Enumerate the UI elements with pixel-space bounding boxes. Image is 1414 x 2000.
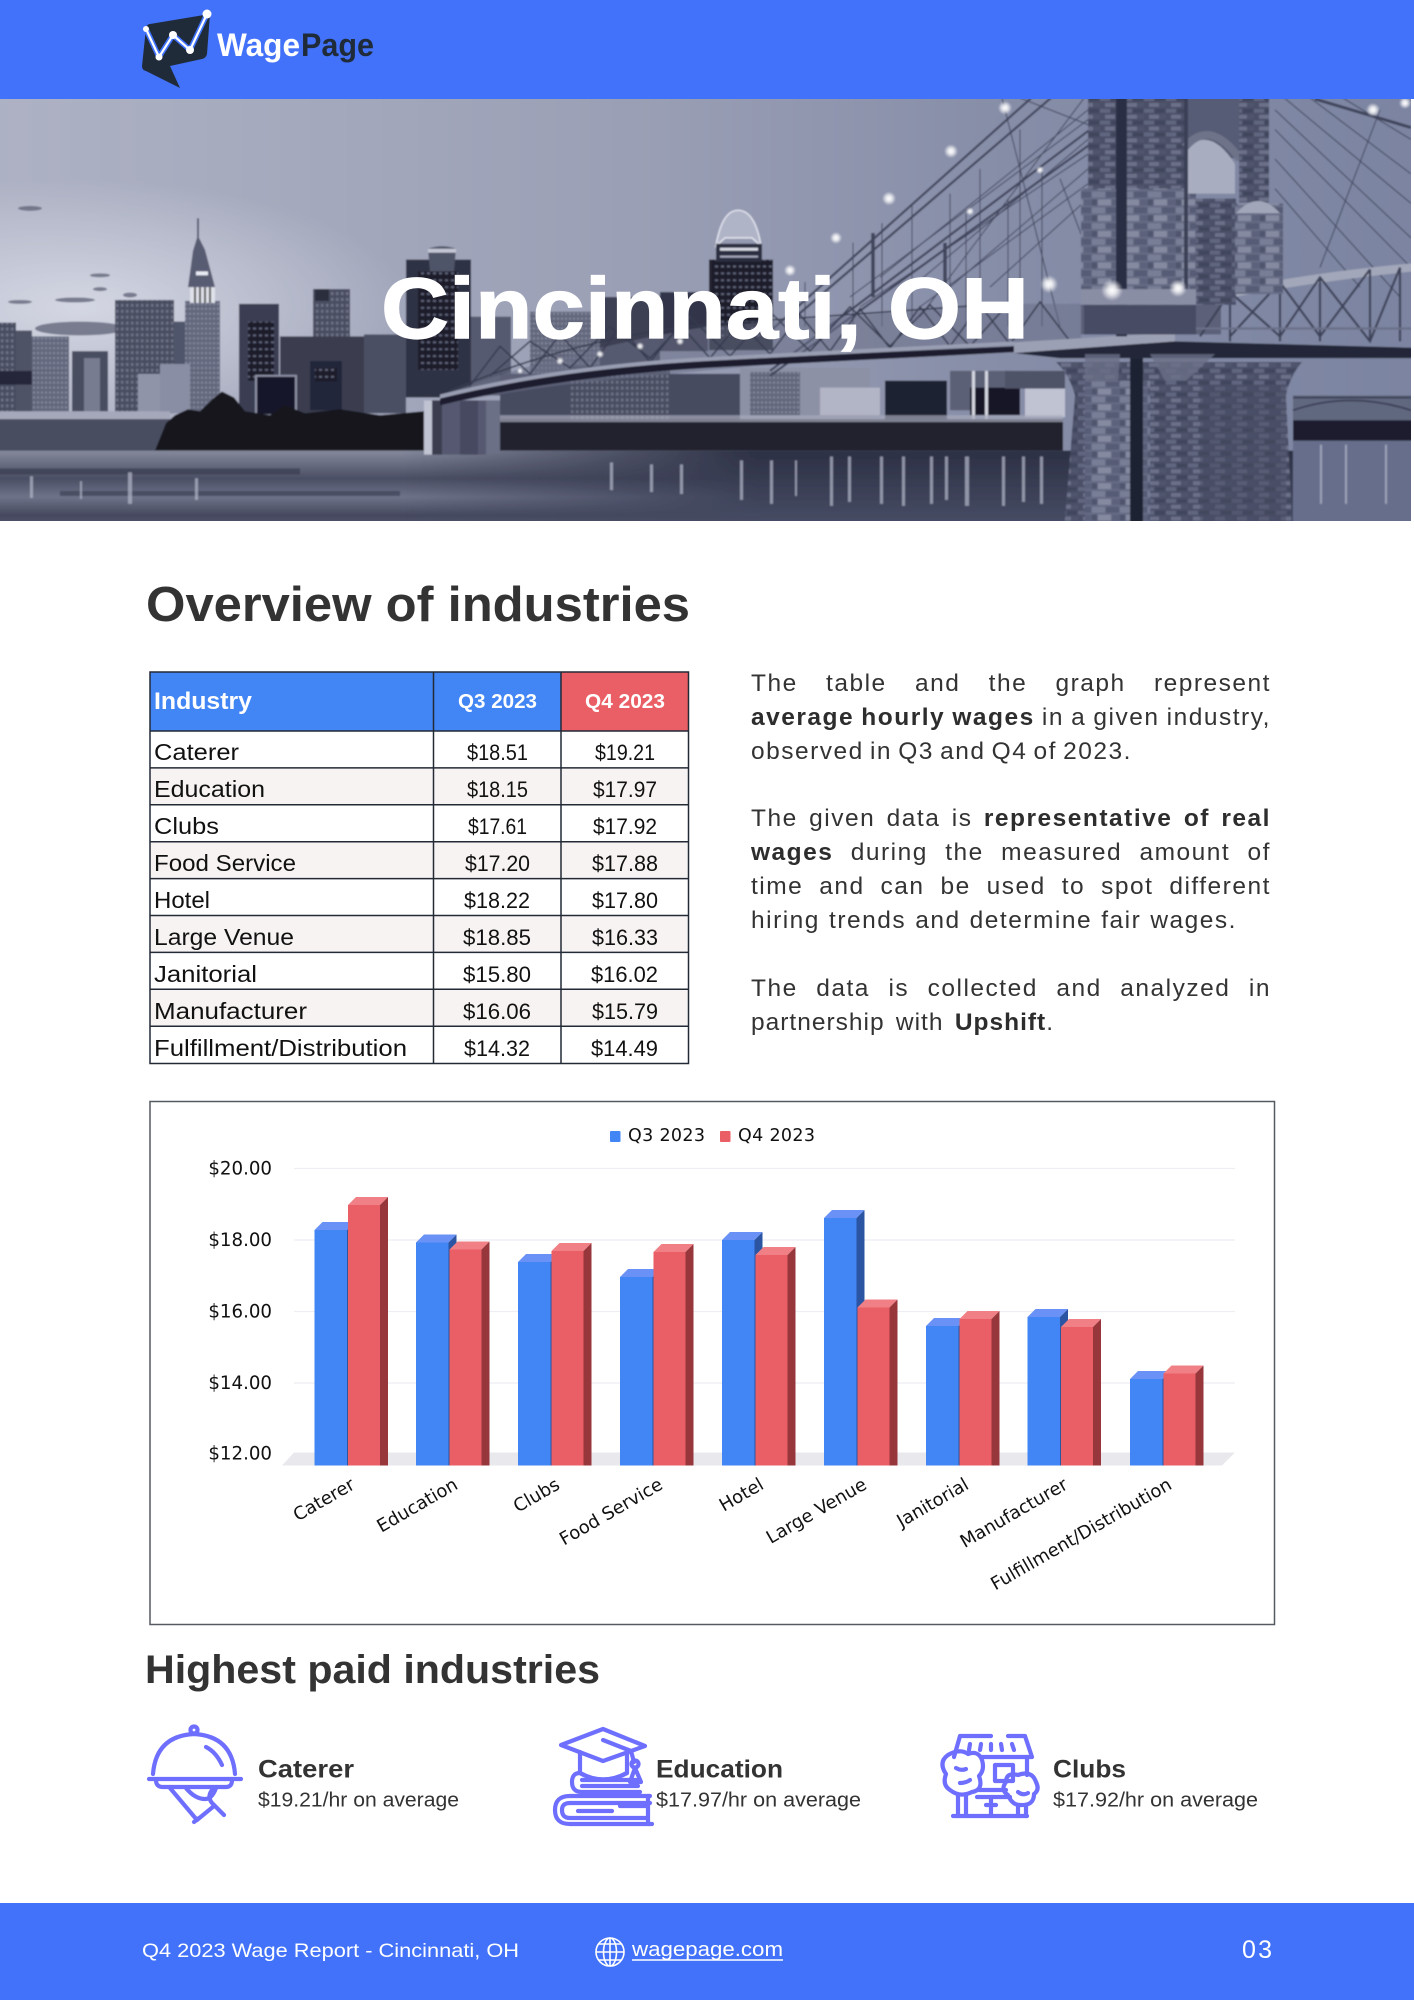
x axis labels: Janitorial bbox=[892, 1474, 972, 1532]
gridlines bbox=[294, 1168, 1235, 1383]
text block: table and graph description: given bbox=[1093, 704, 1160, 731]
text block: table and graph description: of bbox=[1034, 738, 1057, 765]
text block: table and graph description: hiring bbox=[751, 907, 820, 934]
text block: table and graph description: can bbox=[881, 873, 925, 900]
heading: overview of industries: Overview of industries bbox=[146, 578, 690, 632]
item: Caterer: Caterer bbox=[258, 1756, 354, 1784]
text block: table and graph description: measured bbox=[1001, 839, 1122, 866]
text block: table and graph description: trends bbox=[829, 907, 906, 934]
text block: table and graph description: wages bbox=[751, 839, 833, 866]
x axis labels bbox=[290, 1474, 1176, 1595]
wage table: $17.97 bbox=[593, 777, 657, 802]
wage table: $17.88 bbox=[592, 851, 658, 876]
text block: table and graph description: Q4 bbox=[992, 738, 1027, 765]
wage table: Hotel bbox=[154, 887, 210, 913]
y axis labels: $14.00 bbox=[208, 1373, 272, 1394]
text block: table and graph description: and bbox=[1056, 975, 1102, 1002]
wage table: $17.61 bbox=[468, 814, 527, 839]
x axis labels: Caterer bbox=[290, 1474, 359, 1526]
text block: table and graph description: in bbox=[1249, 975, 1271, 1002]
text block: table and graph description: the bbox=[989, 670, 1027, 697]
text block: table and graph description: representative bbox=[984, 805, 1172, 832]
x axis labels: Large Venue bbox=[763, 1474, 870, 1548]
x axis labels: Education bbox=[373, 1474, 462, 1537]
footer report title: Q4 2023 Wage Report - Cincinnati, OH bbox=[142, 1940, 519, 1962]
river bbox=[0, 440, 1411, 521]
bridge cables bbox=[770, 90, 1411, 376]
wage table: Large Venue bbox=[154, 924, 294, 950]
text block: table and graph description: is bbox=[952, 805, 972, 832]
item: Clubs: $17.92/hr on average bbox=[1053, 1790, 1258, 1812]
text block: table and graph description: and bbox=[819, 873, 865, 900]
bridge lights bbox=[517, 97, 1411, 374]
wage table: $17.20 bbox=[465, 851, 530, 876]
x axis labels: Clubs bbox=[510, 1474, 564, 1517]
far city below bridge bbox=[500, 366, 1065, 423]
wage table: $18.22 bbox=[464, 888, 530, 913]
text block: table and graph description: and bbox=[915, 907, 961, 934]
chart legend: Q4 2023 bbox=[738, 1126, 815, 1146]
text block: table and graph description: in bbox=[1042, 704, 1064, 731]
item: Education: $17.97/hr on average bbox=[656, 1790, 861, 1812]
text block: table and graph description: data bbox=[816, 975, 870, 1002]
text block: table and graph description: real bbox=[1221, 805, 1271, 832]
bridge truss and deck bbox=[440, 262, 1414, 405]
text block: table and graph description: The bbox=[751, 805, 798, 832]
main bridge tower bbox=[1081, 90, 1283, 336]
chart legend bbox=[610, 1126, 815, 1146]
bar chart panel bbox=[150, 1102, 1274, 1624]
wage table: Manufacturer bbox=[154, 998, 307, 1024]
text block: table and graph description: The bbox=[751, 975, 798, 1002]
header bar bbox=[0, 0, 1414, 99]
wage table: $15.79 bbox=[592, 999, 658, 1024]
chart legend: Q3 2023 bbox=[628, 1126, 705, 1146]
text block: table and graph description: of bbox=[1248, 839, 1271, 866]
wage table: Janitorial bbox=[154, 961, 257, 987]
icon: storefront with trees bbox=[942, 1736, 1038, 1816]
text block: table and graph description: and bbox=[940, 738, 985, 765]
text block: table and graph description: analyzed bbox=[1120, 975, 1230, 1002]
text block: table and graph description: during bbox=[851, 839, 928, 866]
icon: graduation cap on books bbox=[555, 1729, 652, 1824]
text block: table and graph description: determine bbox=[970, 907, 1092, 934]
wage table: Clubs bbox=[154, 813, 219, 839]
text block: table and graph description: collected bbox=[928, 975, 1038, 1002]
footer bar bbox=[0, 1903, 1414, 2000]
chart floor bbox=[282, 1452, 1235, 1466]
y axis labels: $20.00 bbox=[208, 1158, 272, 1180]
x axis labels: Food Service bbox=[556, 1474, 666, 1550]
text block: table and graph description: the bbox=[945, 839, 984, 866]
item: Clubs: Clubs bbox=[1053, 1756, 1126, 1784]
text block: table and graph description: to bbox=[1062, 873, 1085, 900]
text block: table and graph description: different bbox=[1169, 873, 1271, 900]
shoreline and trees bbox=[0, 392, 1414, 451]
text block: table and graph description: The bbox=[751, 670, 798, 697]
text block: table and graph description: in bbox=[870, 738, 892, 765]
wage table bbox=[150, 672, 689, 1064]
text block: table and graph description: wages. bbox=[1150, 907, 1237, 934]
wage table: Industry bbox=[154, 688, 253, 715]
x axis labels: Hotel bbox=[716, 1474, 768, 1516]
footer website link: wagepage.com bbox=[631, 1939, 783, 1961]
heading: highest paid industries: Highest paid industries bbox=[145, 1648, 600, 1692]
text block: table and graph description: average bbox=[751, 704, 854, 731]
bars: Q3 2023 and Q4 2023 bbox=[314, 1197, 1204, 1466]
text block: table and graph description: hourly bbox=[861, 704, 945, 731]
hero photo: Cincinnati skyline and Roebling bridge bbox=[0, 99, 1411, 521]
icon: globe bbox=[596, 1938, 624, 1966]
lower bridge pier bbox=[1056, 353, 1302, 521]
wage table: $16.02 bbox=[591, 962, 658, 987]
x axis labels: Manufacturer bbox=[957, 1474, 1072, 1553]
y axis labels: $12.00 bbox=[208, 1444, 272, 1464]
text block: table and graph description: Upshift. bbox=[955, 1009, 1054, 1036]
item: Caterer: $19.21/hr on average bbox=[258, 1790, 459, 1812]
text block: table and graph description: spot bbox=[1101, 873, 1153, 900]
wage table: $18.15 bbox=[467, 777, 528, 802]
logo: WagePage: Page bbox=[301, 27, 374, 63]
text block: table and graph description: of bbox=[1184, 805, 1210, 832]
item: Caterer bbox=[149, 1726, 459, 1822]
y axis labels bbox=[208, 1158, 272, 1464]
wage table: $14.49 bbox=[591, 1036, 658, 1061]
wage table: $17.80 bbox=[592, 888, 658, 913]
wage table: $16.33 bbox=[592, 925, 658, 950]
wage table: Q4 2023 bbox=[585, 691, 665, 713]
text block: table and graph description: graph bbox=[1056, 670, 1126, 697]
wage table: Q3 2023 bbox=[458, 691, 537, 713]
text block: table and graph description: wages bbox=[952, 704, 1035, 731]
text block: table and graph description: a bbox=[1071, 704, 1086, 731]
text block: table and graph description: time bbox=[751, 873, 803, 900]
y axis labels: $18.00 bbox=[208, 1230, 272, 1251]
text block: table and graph description: industry, bbox=[1167, 704, 1271, 731]
text block: table and graph description: used bbox=[987, 873, 1046, 900]
skyline bbox=[0, 210, 773, 421]
text block: table and graph description bbox=[751, 670, 1271, 1036]
y axis labels: $16.00 bbox=[208, 1302, 272, 1322]
text block: table and graph description: with bbox=[896, 1009, 943, 1036]
text block: table and graph description: given bbox=[809, 805, 875, 832]
text block: table and graph description: data bbox=[887, 805, 940, 832]
wage table: $14.32 bbox=[464, 1036, 530, 1061]
icon: serving cloche bbox=[149, 1726, 241, 1822]
text block: table and graph description: partnership bbox=[751, 1009, 885, 1036]
item: Education: Education bbox=[656, 1756, 783, 1784]
wage table: $16.06 bbox=[463, 999, 531, 1024]
logo: WagePage bbox=[142, 10, 374, 88]
wage table: Education bbox=[154, 776, 265, 802]
text block: table and graph description: table bbox=[826, 670, 887, 697]
text block: table and graph description: observed bbox=[751, 738, 864, 765]
wage table: $17.92 bbox=[593, 814, 657, 839]
x axis labels: Fulfillment/Distribution bbox=[987, 1474, 1176, 1595]
text block: table and graph description: 2023. bbox=[1063, 738, 1132, 765]
page number: 03 bbox=[1242, 1936, 1272, 1964]
hero title: Cincinnati, OH bbox=[381, 261, 1029, 357]
left bridge pier bbox=[424, 400, 500, 455]
wage table: Caterer bbox=[154, 739, 239, 765]
item: Education bbox=[555, 1729, 861, 1824]
text block: table and graph description: and bbox=[915, 670, 960, 697]
wage table: Food Service bbox=[154, 850, 296, 876]
wage table: $18.51 bbox=[467, 740, 528, 765]
text block: table and graph description: fair bbox=[1101, 907, 1141, 934]
item: Clubs bbox=[942, 1736, 1258, 1816]
text block: table and graph description: amount bbox=[1139, 839, 1230, 866]
text block: table and graph description: represent bbox=[1154, 670, 1271, 697]
wage table: $19.21 bbox=[595, 740, 655, 765]
text block: table and graph description: be bbox=[940, 873, 971, 900]
wage table: $18.85 bbox=[463, 925, 531, 950]
wage table: Fulfillment/Distribution bbox=[154, 1035, 407, 1061]
text block: table and graph description: is bbox=[888, 975, 909, 1002]
wage table: $15.80 bbox=[463, 962, 531, 987]
logo: WagePage: Wage bbox=[217, 27, 300, 63]
text block: table and graph description: Q3 bbox=[898, 738, 934, 765]
